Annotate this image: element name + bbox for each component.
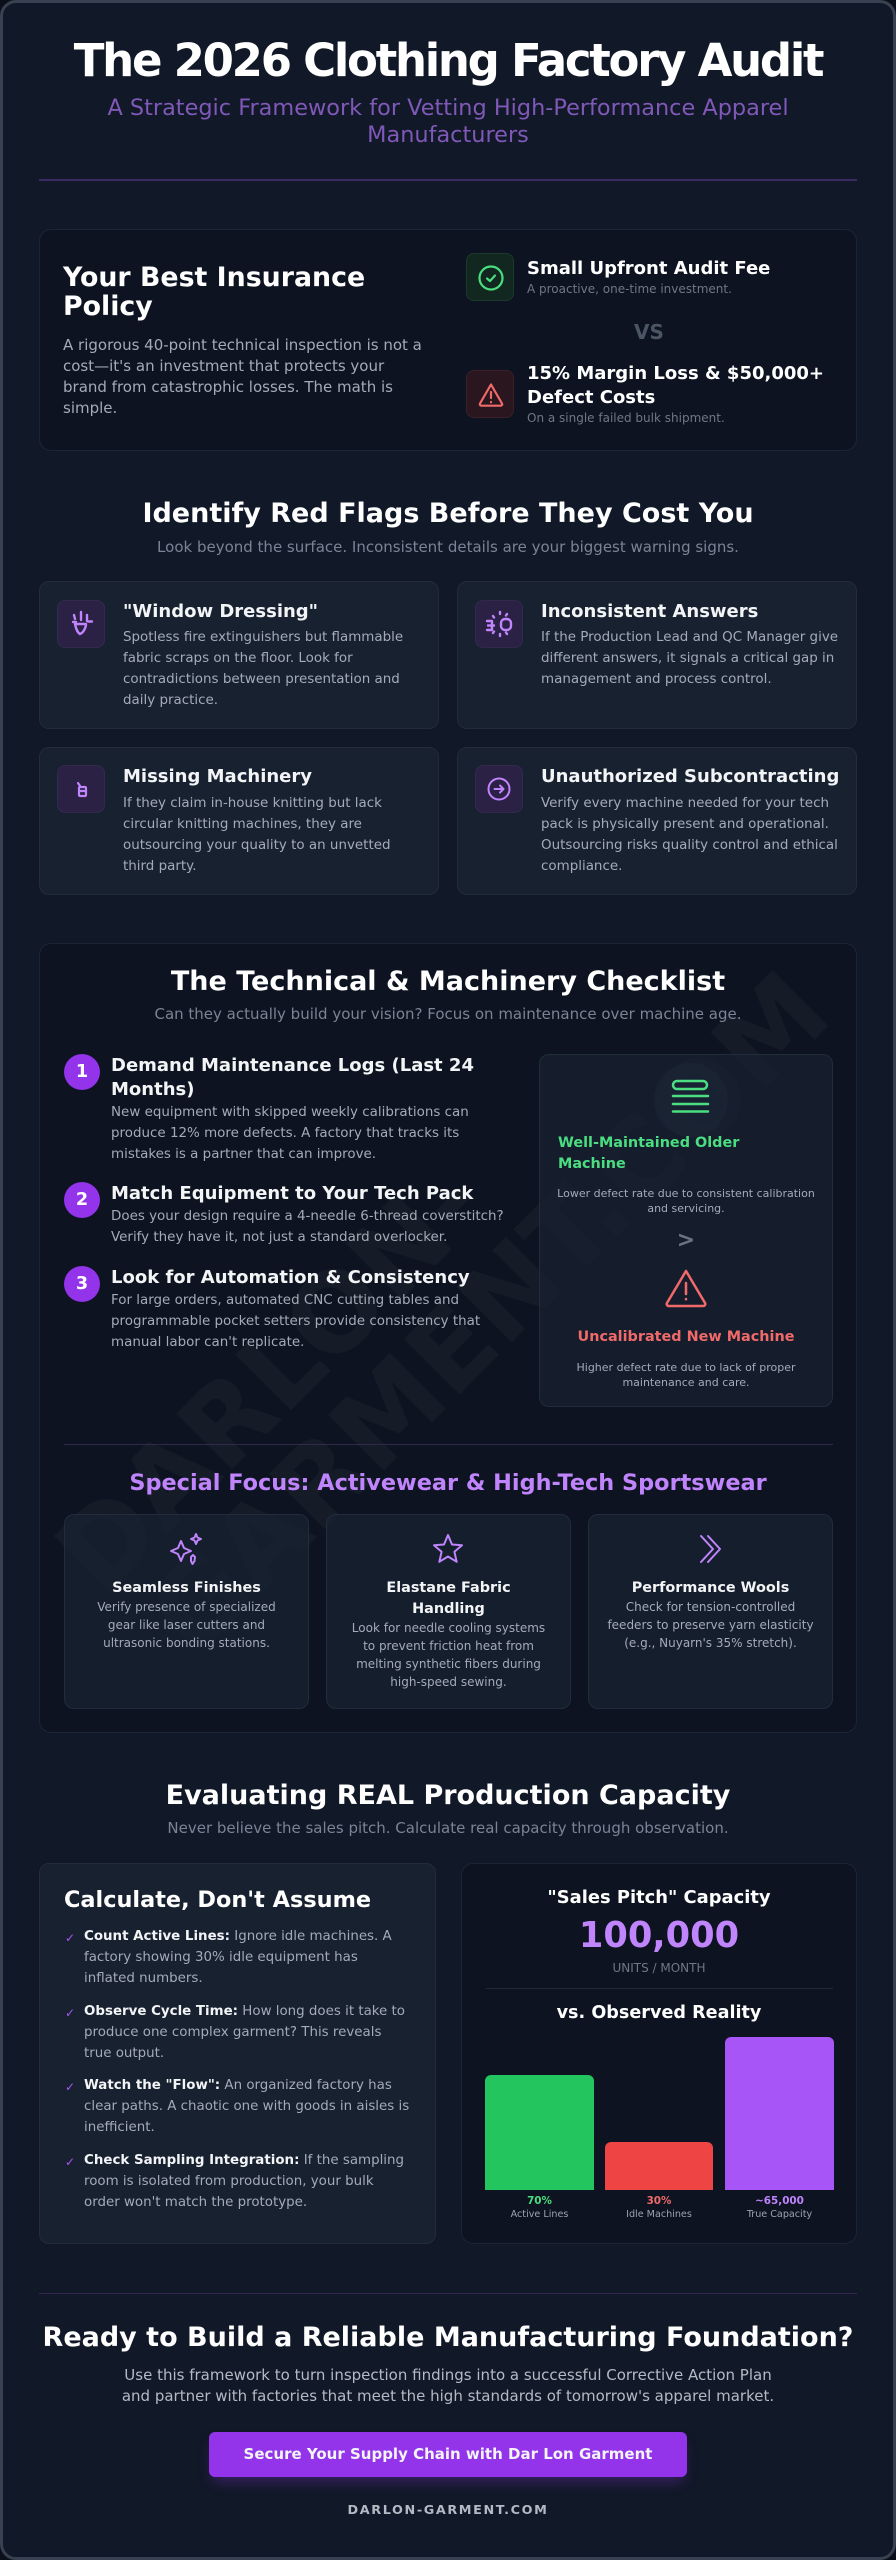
number badge 2 xyxy=(64,1182,100,1218)
text: sales pitch: "Sales Pitch" Capacity xyxy=(547,1887,771,1908)
step 3 description: programmable pocket setters provide consistency that xyxy=(111,1314,480,1329)
list item: sampling: order won't match the prototype. xyxy=(84,2195,307,2210)
description: compliance. xyxy=(541,859,622,874)
description xyxy=(352,1621,545,1689)
description: feeders to preserve yarn elasticity xyxy=(607,1618,814,1632)
description: melting synthetic fibers during xyxy=(356,1657,541,1671)
description: Verify presence of specialized xyxy=(97,1600,276,1614)
bar: active lines: 70% xyxy=(527,2195,552,2207)
icon: red warning xyxy=(466,370,514,418)
heading: best insurance policy xyxy=(62,262,365,322)
description: Verify every machine needed for your tech xyxy=(541,796,829,811)
step 2 description xyxy=(111,1209,504,1245)
heading: production capacity: Evaluating REAL Production Capacity xyxy=(166,1780,730,1811)
bar: active lines: Active Lines xyxy=(511,2209,568,2220)
subheading: technical checklist: Can they actually build your vision? Focus on maintenance over machine age. xyxy=(154,1005,742,1023)
text: well maintained xyxy=(557,1187,815,1215)
bar: true capacity: ~65,000 xyxy=(755,2195,804,2207)
description: different answers, it signals a critical gap in xyxy=(541,651,834,666)
text: audit fee xyxy=(527,258,770,296)
list item: sampling: ✓ xyxy=(65,2155,75,2169)
text: insurance explanation: A rigorous 40-point technical inspection is not a xyxy=(63,336,422,354)
heading: well maintained: Well-Maintained Older xyxy=(558,1135,739,1151)
step 1 description: New equipment with skipped weekly calibrations can xyxy=(111,1105,469,1120)
subheading: red flags: Look beyond the surface. Inconsistent details are your biggest warning signs. xyxy=(157,538,739,556)
list item: active lines: ✓ xyxy=(65,1931,75,1945)
panel: insurance policy xyxy=(39,229,857,451)
list item: flow: Watch the "Flow": An organized factory has xyxy=(84,2078,392,2093)
comparison card: older vs new machine xyxy=(539,1054,833,1407)
heading: red flags: Identify Red Flags Before They Cost You xyxy=(142,498,754,529)
text: margin loss: Defect Costs xyxy=(527,387,655,408)
text: call to action xyxy=(39,2365,857,2407)
description: ultrasonic bonding stations. xyxy=(103,1636,270,1650)
bar: true capacity xyxy=(725,2037,834,2220)
card: window dressing xyxy=(39,581,439,729)
description: contradictions between presentation and xyxy=(123,672,400,687)
footer url: DARLON-GARMENT.COM xyxy=(348,2503,548,2518)
card: seamless finishes xyxy=(64,1514,309,1709)
section: call to action xyxy=(39,2318,857,2528)
bar chart xyxy=(485,2037,834,2220)
text: margin loss xyxy=(527,363,824,425)
subtitle: Manufacturers xyxy=(367,122,529,148)
list item: cycle time: produce one complex garment? This reveals xyxy=(84,2025,381,2040)
vs label: VS xyxy=(634,320,664,344)
list item: cycle time xyxy=(65,2004,405,2061)
step 2 title: Match Equipment to Your Tech Pack xyxy=(111,1183,473,1204)
description: Look for needle cooling systems xyxy=(352,1621,545,1635)
icon: sparkles xyxy=(170,1533,202,1565)
description xyxy=(607,1600,814,1650)
number badge 1: 1 xyxy=(76,1062,88,1082)
step 3 description xyxy=(111,1293,480,1350)
step 1 description xyxy=(111,1105,469,1162)
text: margin loss: 15% Margin Loss & $50,000+ xyxy=(527,363,824,384)
bar: true capacity: True Capacity xyxy=(747,2209,812,2220)
description: Outsourcing risks quality control and ethical xyxy=(541,838,838,853)
number badge 1 xyxy=(64,1054,100,1090)
text: well maintained: and servicing. xyxy=(647,1202,725,1215)
step 1 title: Months) xyxy=(111,1079,194,1100)
description: Spotless fire extinguishers but flammable xyxy=(123,630,403,645)
description: fabric scraps on the floor. Look for xyxy=(123,651,353,666)
step 1 description: produce 12% more defects. A factory that tracks its xyxy=(111,1126,459,1141)
step 1 title: Demand Maintenance Logs (Last 24 xyxy=(111,1055,474,1076)
section: red flags xyxy=(39,498,857,895)
list item: cycle time: Observe Cycle Time: How long does it take to xyxy=(84,2004,405,2019)
heading: special focus: Special Focus: Activewear & High-Tech Sportswear xyxy=(129,1470,767,1496)
title: Inconsistent Answers xyxy=(541,601,758,622)
text: margin loss: On a single failed bulk shipment. xyxy=(527,411,725,425)
icon: window dressing xyxy=(57,600,105,648)
button: Secure Your Supply Chain with Dar Lon Garment xyxy=(244,2445,652,2463)
description: to prevent friction heat from xyxy=(363,1639,534,1653)
text: audit fee: Small Upfront Audit Fee xyxy=(527,258,770,279)
icon: red warning xyxy=(665,1270,707,1308)
heading: call to action: Ready to Build a Reliable Manufacturing Foundation? xyxy=(43,2322,853,2353)
card: unauthorized subcontracting xyxy=(457,747,857,895)
description: If the Production Lead and QC Manager give xyxy=(541,630,838,645)
number badge 3 xyxy=(64,1266,100,1302)
bar: idle machines xyxy=(605,2142,713,2220)
bar: idle machines: 30% xyxy=(647,2195,671,2207)
heading: well maintained xyxy=(558,1135,740,1172)
title: "Window Dressing" xyxy=(123,601,318,622)
text: insurance explanation: cost—it's an investment that protects your xyxy=(63,357,384,375)
subheading: production capacity: Never believe the sales pitch. Calculate real capacity through observation. xyxy=(167,1819,729,1837)
title: Elastane Fabric xyxy=(386,1580,511,1596)
step 2 xyxy=(64,1182,504,1245)
text: observed reality: vs. Observed Reality xyxy=(557,2003,761,2023)
text: insurance explanation: brand from catastrophic losses. The math is xyxy=(63,378,393,396)
description xyxy=(541,796,838,874)
icon: arrow in circle xyxy=(475,765,523,813)
text: insurance explanation xyxy=(63,336,422,417)
panel: technical and machinery checklist xyxy=(39,943,857,1733)
heading: technical checklist: The Technical & Machinery Checklist xyxy=(171,966,725,997)
header xyxy=(74,34,824,148)
title: The 2026 Clothing Factory Audit xyxy=(74,34,822,87)
text: call to action: and partner with factories that meet the high standards of tomorrow's apparel market. xyxy=(122,2387,774,2405)
list item: cycle time: true output. xyxy=(84,2046,164,2061)
description: third party. xyxy=(123,859,196,874)
heading: well maintained: Machine xyxy=(558,1156,626,1172)
number badge 3: 3 xyxy=(76,1274,88,1294)
list item: flow: clear paths. A chaotic one with goods in aisles is xyxy=(84,2099,409,2114)
list item: active lines: inflated numbers. xyxy=(84,1971,203,1986)
step 1 title xyxy=(111,1055,474,1100)
icon: green machine lines xyxy=(672,1080,710,1113)
step 1 description: mistakes is a partner that can improve. xyxy=(111,1147,376,1162)
card: inconsistent answers xyxy=(457,581,857,729)
description xyxy=(123,796,391,874)
list item: active lines: factory showing 30% idle equipment has xyxy=(84,1950,358,1965)
list item: active lines xyxy=(65,1929,392,1986)
description: If they claim in-house knitting but lack xyxy=(123,796,382,811)
list item: active lines: Count Active Lines: Ignore idle machines. A xyxy=(84,1929,392,1944)
description: high-speed sewing. xyxy=(390,1675,507,1689)
button xyxy=(209,2432,687,2477)
heading: best insurance policy: Your Best Insurance xyxy=(63,262,365,293)
list item: sampling xyxy=(65,2153,404,2210)
text: well maintained: Lower defect rate due to consistent calibration xyxy=(557,1187,815,1200)
text: uncalibrated: Higher defect rate due to lack of proper xyxy=(576,1361,796,1374)
icon: double chevron xyxy=(700,1535,721,1563)
big number: 100,000 xyxy=(579,1915,739,1956)
description: management and process control. xyxy=(541,672,772,687)
description: pack is physically present and operational. xyxy=(541,817,829,832)
description: Check for tension-controlled xyxy=(626,1600,795,1614)
bar: idle machines: Idle Machines xyxy=(626,2209,692,2220)
description: daily practice. xyxy=(123,693,218,708)
watermark: GARMENT.COM xyxy=(126,949,853,1676)
step 3 title: Look for Automation & Consistency xyxy=(111,1267,470,1288)
text: audit fee: A proactive, one-time investment. xyxy=(527,282,732,296)
heading: best insurance policy: Policy xyxy=(63,291,153,322)
subtitle xyxy=(107,95,789,148)
step 3 xyxy=(64,1266,480,1350)
title: Unauthorized Subcontracting xyxy=(541,766,839,787)
text: uncalibrated: maintenance and care. xyxy=(622,1376,750,1389)
list item: flow: ✓ xyxy=(65,2080,75,2094)
list item: flow: inefficient. xyxy=(84,2120,155,2135)
heading: uncalibrated: Uncalibrated New Machine xyxy=(578,1329,794,1345)
heading: calculate: Calculate, Don't Assume xyxy=(64,1887,371,1913)
icon: green check xyxy=(466,253,514,301)
card: missing machinery xyxy=(39,747,439,895)
section: production capacity xyxy=(39,1780,857,2244)
description xyxy=(541,630,838,687)
step 2 description: Does your design require a 4-needle 6-thread coverstitch? xyxy=(111,1209,504,1224)
step 3 description: manual labor can't replicate. xyxy=(111,1335,304,1350)
description: outsourcing your quality to an unvetted xyxy=(123,838,391,853)
list item: sampling: room is isolated from production, your bulk xyxy=(84,2174,374,2189)
card: performance wools xyxy=(588,1514,833,1709)
text: uncalibrated xyxy=(576,1361,796,1389)
step 3 description: For large orders, automated CNC cutting tables and xyxy=(111,1293,459,1308)
description: gear like laser cutters and xyxy=(108,1618,265,1632)
title: Missing Machinery xyxy=(123,766,312,787)
list item: cycle time: ✓ xyxy=(65,2006,75,2020)
greater than symbol: > xyxy=(677,1228,695,1253)
title: Seamless Finishes xyxy=(112,1580,261,1596)
number badge 2: 2 xyxy=(76,1190,88,1210)
list item: flow xyxy=(65,2078,409,2135)
bar: active lines xyxy=(485,2075,594,2220)
title: Performance Wools xyxy=(632,1580,789,1596)
unit label: UNITS / MONTH xyxy=(612,1961,706,1975)
text: insurance explanation: simple. xyxy=(63,399,117,417)
description: circular knitting machines, they are xyxy=(123,817,362,832)
title xyxy=(386,1580,511,1617)
icon: star xyxy=(433,1534,463,1563)
step 1 xyxy=(64,1054,474,1162)
title: Handling xyxy=(412,1601,485,1617)
watermark: DARLON- xyxy=(39,1141,509,1617)
panel: capacity chart xyxy=(461,1863,857,2244)
text: call to action: Use this framework to turn inspection findings into a successful Corrective Action Plan xyxy=(124,2366,772,2384)
panel: calculate xyxy=(39,1863,436,2244)
description: (e.g., Nuyarn's 35% stretch). xyxy=(624,1636,797,1650)
description xyxy=(123,630,403,708)
card: elastane xyxy=(326,1514,571,1709)
list item: sampling: Check Sampling Integration: If the sampling xyxy=(84,2153,404,2168)
subtitle: A Strategic Framework for Vetting High-Performance Apparel xyxy=(107,95,789,121)
description xyxy=(97,1600,276,1650)
icon: missing machinery xyxy=(57,765,105,813)
icon: inconsistent answers xyxy=(475,600,523,648)
step 2 description: Verify they have it, not just a standard overlocker. xyxy=(111,1230,447,1245)
